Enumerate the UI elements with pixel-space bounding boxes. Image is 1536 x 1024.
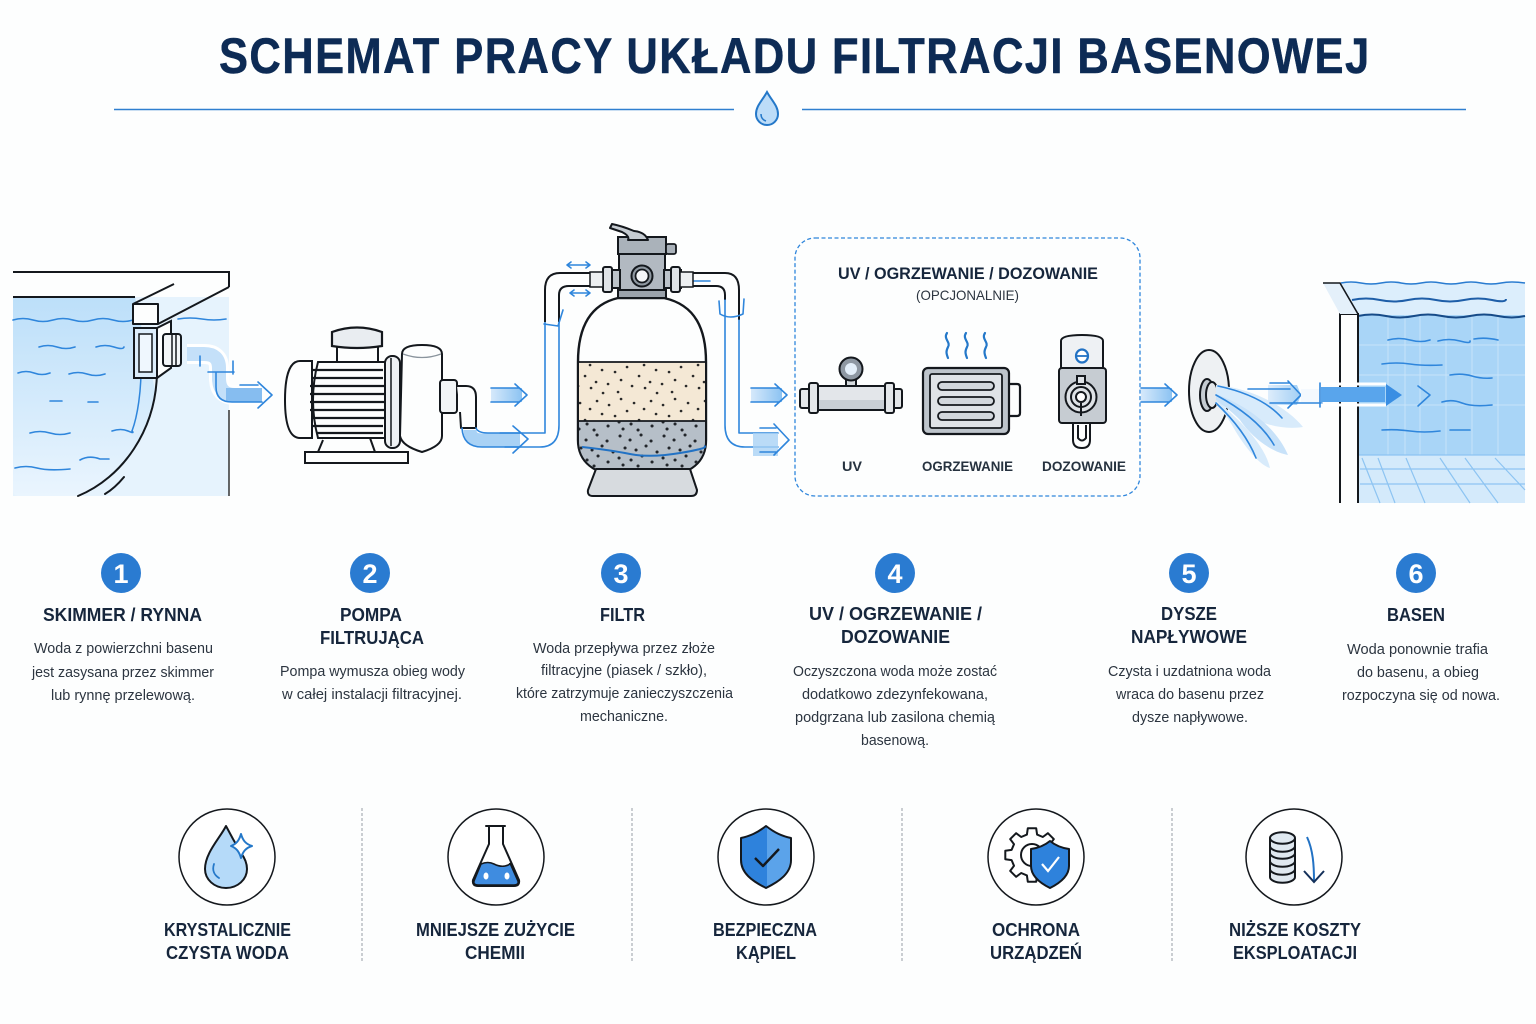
label — [416, 920, 575, 963]
step 3 — [516, 553, 734, 725]
benefit: safe bathing — [713, 809, 817, 963]
heading 2: POMPA — [340, 605, 402, 625]
description 1: Woda z powierzchni basenu — [34, 641, 213, 657]
skimmer body — [133, 284, 229, 378]
description 1: jest zasysana przez skimmer — [31, 665, 214, 681]
badge 4: 4 — [887, 559, 903, 589]
description 6 — [1342, 642, 1500, 704]
description 6: do basenu, a obieg — [1357, 665, 1479, 681]
description 1: lub rynnę przelewową. — [51, 688, 195, 704]
description 4: dodatkowo zdezynfekowana, — [802, 687, 988, 703]
benefit: crystal clear water — [164, 809, 291, 963]
label: heating: OGRZEWANIE — [922, 458, 1013, 474]
illustration: return nozzle — [1189, 350, 1303, 468]
description 2: w całej instalacji filtracyjnej. — [281, 687, 462, 703]
badge 5: 5 — [1181, 559, 1197, 589]
label: UV: UV — [842, 458, 863, 474]
step 6 — [1342, 553, 1500, 704]
label: CHEMII — [465, 943, 525, 963]
multiport valve — [590, 224, 693, 298]
label: URZĄDZEŃ — [990, 942, 1082, 963]
tank — [578, 298, 706, 475]
description 5 — [1108, 664, 1272, 726]
badge 2: 2 — [362, 559, 378, 589]
panel subheading: (OPCJONALNIE) — [916, 287, 1019, 303]
tank stand — [588, 469, 697, 496]
badge 3 — [601, 553, 641, 593]
panel: optional treatment — [795, 238, 1140, 496]
illustration: skimmer and pool — [13, 272, 272, 496]
description 2 — [280, 664, 466, 703]
label — [164, 920, 291, 963]
flow pipe: pump to filter — [462, 426, 528, 453]
illustration: sand filter — [500, 224, 789, 496]
panel heading: UV / OGRZEWANIE / DOZOWANIE — [838, 264, 1098, 283]
icon: dosing pump — [1059, 335, 1106, 448]
water jets — [1216, 385, 1303, 468]
heading 6: BASEN — [1387, 605, 1445, 625]
badge 6: 6 — [1408, 559, 1424, 589]
label: CZYSTA WODA — [166, 943, 289, 963]
heading 5: NAPŁYWOWE — [1131, 627, 1247, 647]
label: KĄPIEL — [736, 943, 796, 963]
description 4: podgrzana lub zasilona chemią — [795, 710, 996, 726]
icon: coins with down arrow — [1246, 809, 1342, 905]
inlet pipe — [500, 262, 605, 447]
icon: heater — [923, 333, 1020, 434]
return flow arrow — [1248, 381, 1430, 408]
heading 4: UV / OGRZEWANIE / — [809, 604, 982, 624]
title: SCHEMAT PRACY UKŁADU FILTRACJI BASENOWEJ — [219, 28, 1369, 84]
label — [990, 920, 1082, 963]
sand layer — [579, 362, 705, 421]
benefit: equipment protection — [988, 809, 1084, 963]
description 6: Woda ponownie trafia — [1347, 642, 1489, 658]
description 5: Czysta i uzdatniona woda — [1108, 664, 1272, 680]
badge 6 — [1396, 553, 1436, 593]
step 4 — [793, 553, 997, 749]
badge 1: 1 — [113, 559, 129, 589]
description 4 — [793, 664, 997, 749]
pool wall — [1340, 314, 1358, 503]
step 1 — [31, 553, 214, 704]
illustration: pump — [285, 328, 476, 463]
description 3: mechaniczne. — [580, 709, 668, 725]
description 2: Pompa wymusza obieg wody — [280, 664, 466, 680]
badge 4 — [875, 553, 915, 593]
heading 1: SKIMMER / RYNNA — [43, 605, 202, 625]
description 3: Woda przepływa przez złoże — [533, 641, 715, 657]
outlet pipe arrow — [187, 354, 272, 408]
badge 5 — [1169, 553, 1209, 593]
outlet pipe — [690, 273, 789, 456]
icon: sparkling drop — [179, 809, 275, 905]
title divider with water drop — [114, 92, 1466, 125]
heading 4: DOZOWANIE — [841, 627, 950, 647]
description 5: dysze napływowe. — [1132, 710, 1248, 726]
label: BEZPIECZNA — [713, 920, 817, 940]
heading 2 — [320, 605, 424, 648]
description 1 — [31, 641, 214, 704]
benefit: lower costs — [1229, 809, 1361, 963]
description 3: filtracyjne (piasek / szkło), — [541, 663, 707, 679]
illustration: pool — [1248, 282, 1525, 503]
heading 3: FILTR — [600, 605, 645, 625]
icon: shield — [718, 809, 814, 905]
description 6: rozpoczyna się od nowa. — [1342, 688, 1500, 704]
icon: gear and shield — [988, 809, 1084, 905]
label: NIŻSZE KOSZTY — [1229, 920, 1361, 940]
label: OCHRONA — [992, 920, 1080, 940]
description 3: które zatrzymuje zanieczyszczenia — [516, 686, 734, 702]
label: dosing: DOZOWANIE — [1042, 458, 1126, 474]
gravel layer — [579, 421, 705, 474]
heading 2: FILTRUJĄCA — [320, 628, 424, 648]
heading 5: DYSZE — [1161, 604, 1217, 624]
benefit: less chemicals — [416, 809, 575, 963]
heading 5 — [1131, 604, 1247, 647]
heading 4 — [809, 604, 982, 647]
badge 3: 3 — [613, 559, 629, 589]
label — [1229, 920, 1361, 963]
description 5: wraca do basenu przez — [1115, 687, 1264, 703]
label: MNIEJSZE ZUŻYCIE — [416, 920, 575, 940]
icon: UV lamp — [800, 358, 902, 413]
label — [713, 920, 817, 963]
flow arrow: filter to optional module — [751, 384, 787, 406]
step 2 — [280, 553, 466, 703]
label: KRYSTALICZNIE — [164, 920, 291, 940]
flow arrow: module to nozzle — [1141, 384, 1177, 406]
badge 1 — [101, 553, 141, 593]
flow arrow: pump to filter upper — [491, 384, 527, 406]
step 5 — [1108, 553, 1272, 726]
description 4: basenową. — [861, 733, 929, 749]
description 3 — [516, 641, 734, 725]
badge 2 — [350, 553, 390, 593]
label: EKSPLOATACJI — [1233, 943, 1357, 963]
description 4: Oczyszczona woda może zostać — [793, 664, 997, 680]
icon: flask — [448, 809, 544, 905]
